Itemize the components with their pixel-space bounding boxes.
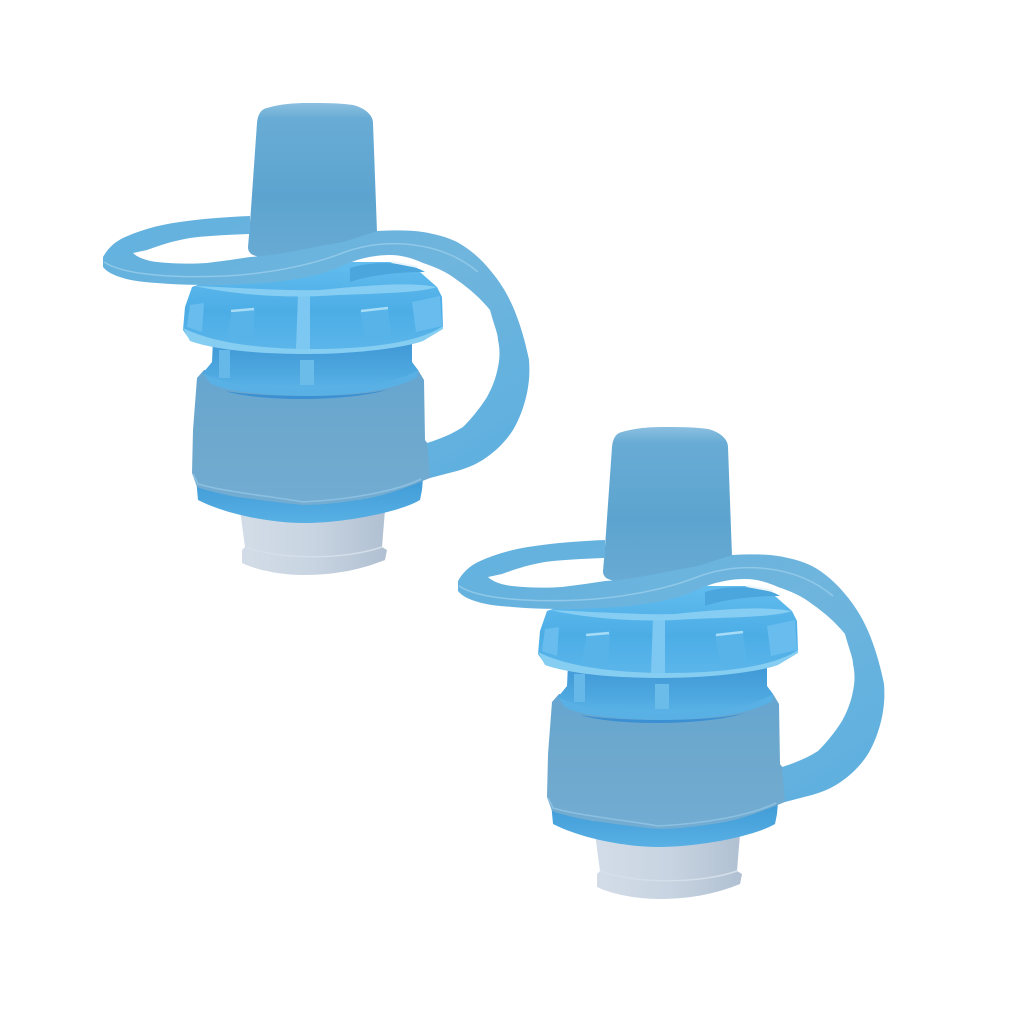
cap 1 xyxy=(103,103,529,575)
stem / plug top xyxy=(248,103,377,258)
cap 2 xyxy=(458,427,884,899)
lower blue band xyxy=(196,478,423,523)
silicone sleeve body with strap root xyxy=(192,370,450,505)
strap ridge highlight xyxy=(104,244,478,277)
pull ring and strap xyxy=(103,216,529,478)
sleeve lip highlight xyxy=(193,474,421,502)
clear plug xyxy=(240,510,387,575)
threaded neck xyxy=(203,340,418,399)
screw collar xyxy=(183,262,443,354)
